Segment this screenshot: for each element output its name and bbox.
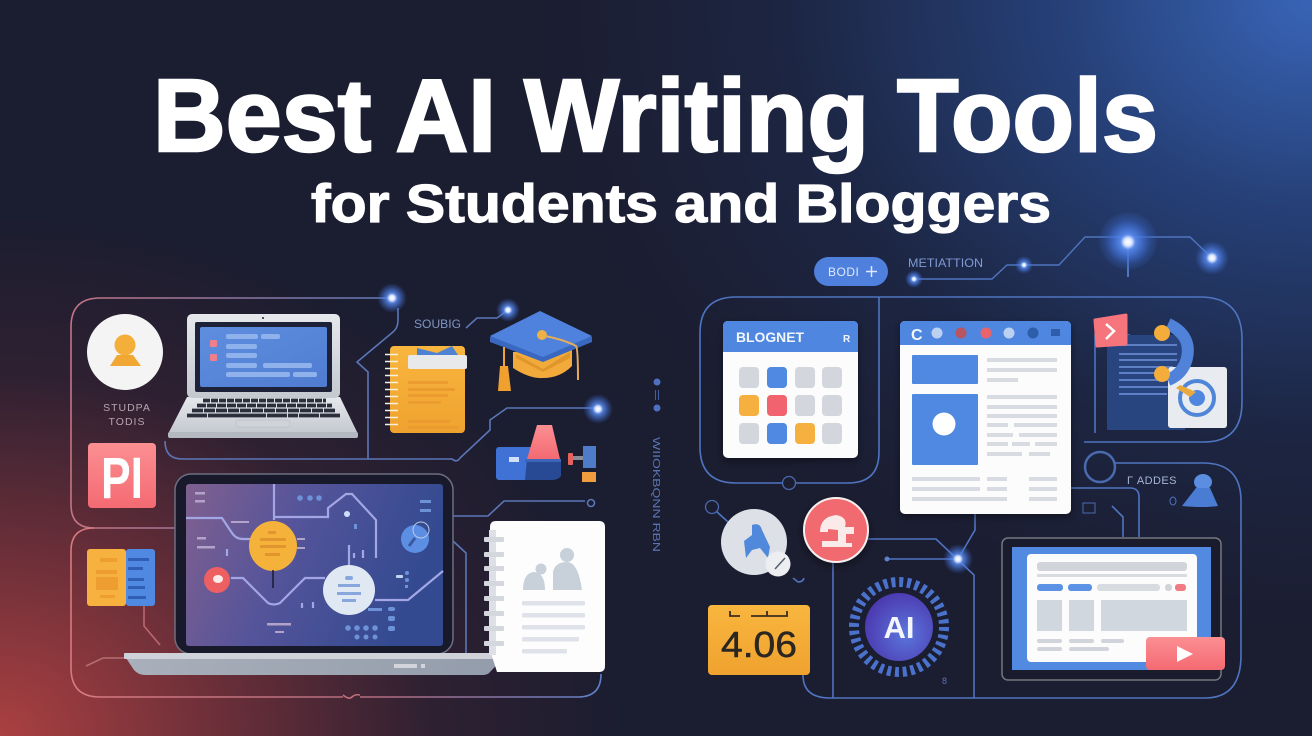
glow nodes: students panel [377, 283, 613, 424]
icon: tablet with video [1002, 538, 1225, 680]
icon: yellow notebook [385, 346, 467, 433]
icon: PI tile: PI [101, 446, 143, 511]
screen: circuit traces [186, 484, 443, 608]
label: student tools: STUDPA [103, 402, 151, 414]
screen: blue node [401, 522, 429, 553]
icon: code window with robot arm [1095, 315, 1227, 430]
icon: large laptop [124, 474, 506, 675]
icon: open notebook [484, 521, 605, 672]
label: audiences: Γ ADDES [1127, 475, 1177, 487]
small rings on outlines [706, 452, 1115, 514]
card: blognet calendar [723, 321, 858, 458]
card: blognet calendar: R [843, 334, 851, 345]
icon: AI badge: AI [884, 610, 914, 645]
icon: AI badge [854, 582, 944, 672]
card: browser article [900, 321, 1071, 514]
title: Best AI Writing Tools [153, 58, 1158, 173]
icon: small laptop [168, 314, 358, 438]
icon: grey circle with figure [721, 509, 790, 576]
screen: orange node [249, 521, 297, 588]
screen: small details [297, 495, 431, 640]
panel: students: TODIS [109, 416, 145, 428]
keyboard rows [187, 400, 340, 416]
small glyph near AI badge: 8 [942, 676, 947, 686]
screen: white node [323, 565, 375, 615]
center divider: dots and vertical label [650, 378, 661, 552]
icon: orange date tile: 4.06 [721, 624, 797, 665]
icon: small desk tools [496, 425, 596, 482]
icon: graduation cap [490, 311, 592, 391]
panel: bloggers [700, 212, 1242, 698]
circuit outlines: bloggers panel [700, 237, 1242, 698]
panel: students [71, 283, 613, 698]
glow nodes: bloggers panel [884, 212, 1229, 574]
icon: blue person [1170, 474, 1218, 507]
icon: red circle [804, 498, 868, 562]
icon: orange date tile [708, 605, 810, 675]
icon: book tile [87, 549, 155, 606]
screen: red node [204, 567, 230, 593]
button: body: BODI [828, 265, 859, 279]
button: body [814, 257, 888, 286]
subtitle: for Students and Bloggers [311, 174, 1051, 234]
card: blognet calendar: BLOGNET [736, 329, 804, 345]
card: browser article: C [911, 327, 923, 344]
label: souring: SOUBIG [414, 319, 461, 331]
label: metation: METIATTION [908, 258, 983, 270]
circuit outlines: students panel [71, 298, 601, 698]
laptop base [124, 655, 506, 675]
center divider: dots and vertical label: WIIOKBQNN RBN [650, 437, 661, 552]
icon: student avatar [87, 314, 163, 390]
